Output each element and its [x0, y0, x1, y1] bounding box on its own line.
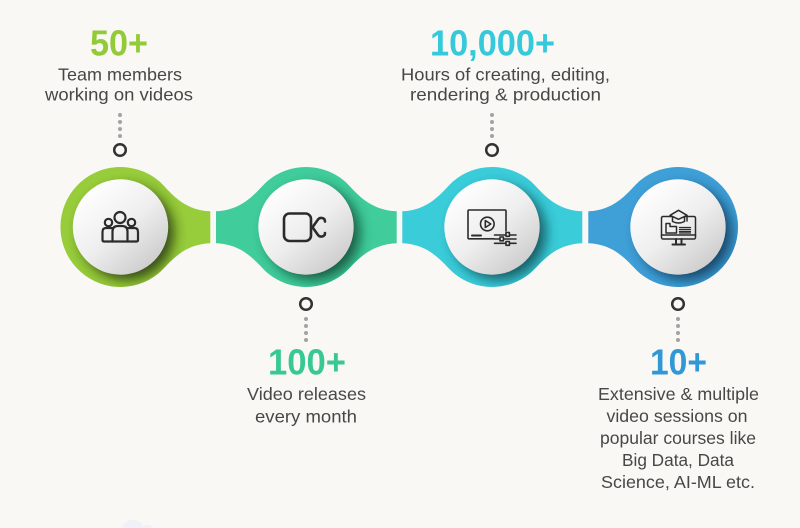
- node 4: video sessions: [588, 167, 738, 287]
- node 3: production hours: [402, 167, 582, 287]
- callout: 10+ video sessions: popular courses like: [600, 428, 756, 448]
- callout: 10+ video sessions: Big Data, Data: [622, 450, 734, 470]
- icon: graduation cap on monitor: [662, 210, 696, 244]
- callout: 10+ video sessions: video sessions on: [606, 406, 748, 426]
- callout: 50+ team members: working on videos: [44, 85, 193, 105]
- icon: team of people: [102, 212, 138, 242]
- callout: 10,000+ hours: rendering & production: [410, 85, 601, 105]
- callout: 50+ team members: [44, 22, 193, 156]
- callout: 10+ video sessions: Science, AI-ML etc.: [601, 472, 755, 492]
- callout: 10,000+ hours: 10,000+: [430, 22, 555, 64]
- white disc 1: [73, 179, 168, 275]
- faint decorative blob at bottom edge: [122, 520, 153, 528]
- white disc 2: [258, 179, 354, 275]
- node 2: video releases: [216, 167, 397, 287]
- callout: 10+ video sessions: 10+: [650, 342, 707, 382]
- callout: 10+ video sessions: Extensive & multiple: [598, 384, 759, 404]
- callout: 10+ video sessions: [598, 298, 759, 492]
- callout: 50+ team members: Team members: [58, 65, 182, 85]
- callout: 100+ video releases: Video releases: [247, 384, 366, 404]
- icon: video camera: [284, 214, 325, 241]
- icon: video editing screen: [468, 210, 516, 245]
- callout: 50+ team members: 50+: [90, 22, 148, 64]
- callout: 10,000+ hours: Hours of creating, editing,: [401, 65, 610, 85]
- callout: 100+ video releases: [247, 298, 366, 426]
- callout: 100+ video releases: every month: [255, 406, 357, 426]
- white disc 3: [444, 179, 540, 275]
- callout: 100+ video releases: 100+: [268, 342, 346, 382]
- node 1: team members: [60, 167, 210, 287]
- white disc 4: [630, 179, 726, 275]
- callout: 10,000+ hours: [401, 22, 610, 156]
